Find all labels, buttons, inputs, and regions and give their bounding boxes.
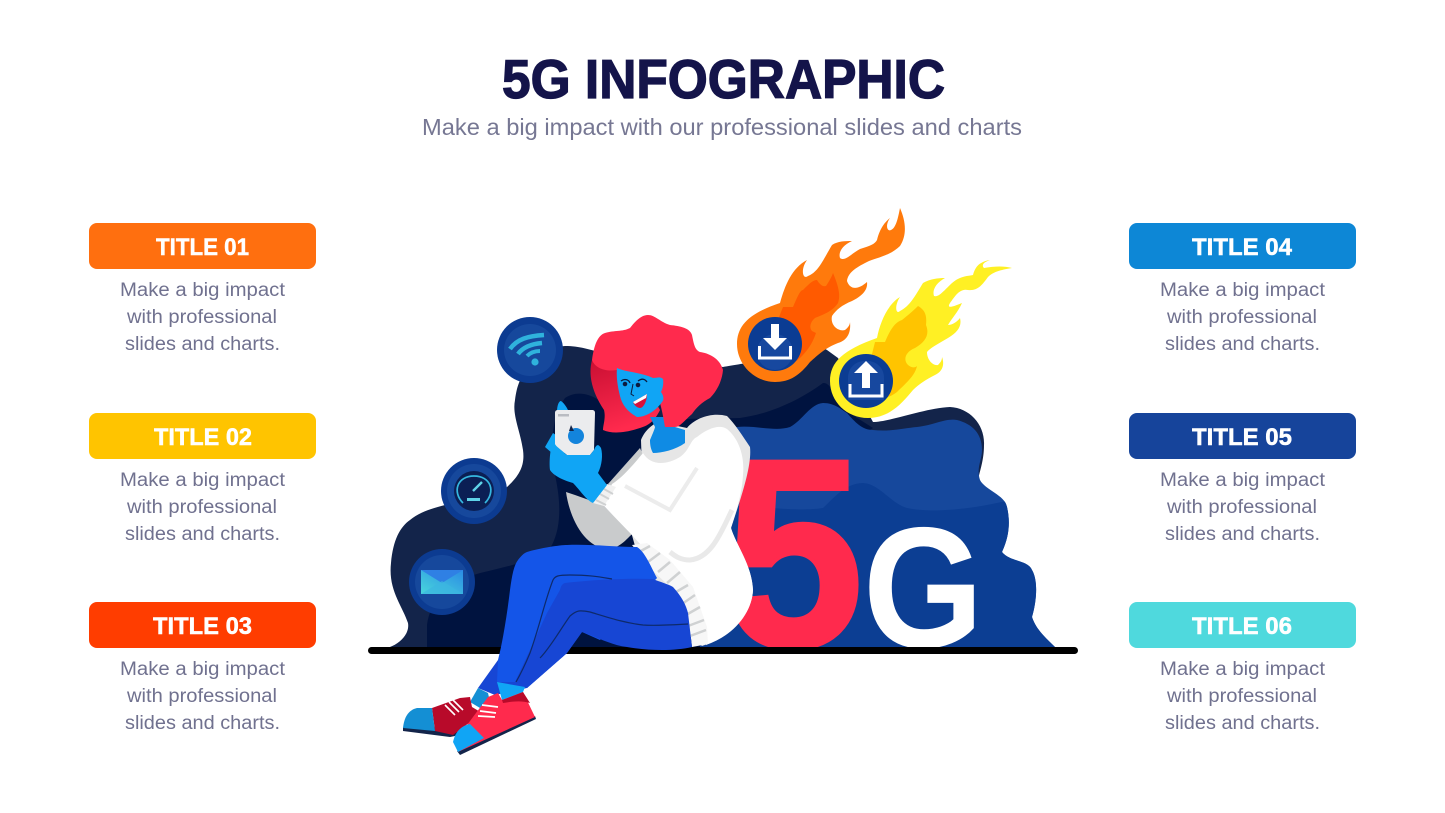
text block: title 05: with professional [1166,497,1317,518]
label bar: title 03 [89,602,316,648]
text block: title 05 [1160,470,1326,545]
icon: wifi [497,317,563,383]
panel: title 06 [1129,602,1356,734]
heading: title 04: TITLE 04 [1192,234,1293,261]
orange flame [737,208,905,382]
ribbed sweater hem [632,543,708,647]
inner flame [868,306,927,398]
sweater fold lower [670,510,732,560]
phone [555,410,595,455]
neck [650,417,685,453]
text block: title 04: slides and charts. [1165,334,1320,355]
text block: title 02: slides and charts. [125,524,280,545]
blue blob lower shade [700,483,1055,647]
trouser seam lower [540,611,688,658]
person [403,315,753,755]
darker background shadow [427,383,873,648]
icon: mail [409,549,475,615]
icon: speedometer [441,458,507,524]
front sock [497,682,525,700]
sweater fold [625,468,697,510]
sweater shell [625,415,753,646]
title: 5G INFOGRAPHIC [502,48,945,110]
text block: title 01: Make a big impact [120,280,286,301]
text block: title 01 [120,280,286,355]
text block: title 01: slides and charts. [125,334,280,355]
ball highlight [757,334,793,370]
heading: title 03: TITLE 03 [153,613,252,640]
text block: title 06 [1160,659,1326,734]
far leg shade [515,579,692,688]
back sock [470,688,490,708]
ball [748,317,802,371]
text block: title 01: with professional [126,307,277,328]
text block: title 04 [1160,280,1326,355]
eyes and nose [621,379,647,396]
fireball: download [737,208,905,382]
text block: title 02 [120,470,286,545]
text block: title 05: slides and charts. [1165,524,1320,545]
label bar: title 01 [89,223,316,269]
ribbed cuff [593,484,616,506]
gray sleeve [566,448,643,549]
big letter G: G [863,491,983,684]
text block: title 04: Make a big impact [1160,280,1326,301]
panel: title 02 [89,413,316,545]
text block: title 04: with professional [1166,307,1317,328]
inner flame [770,273,839,364]
icon: upload tray [850,384,882,396]
heading: title 01: TITLE 01 [156,234,249,261]
text block: title 03: with professional [126,686,277,707]
heading: title 06: TITLE 06 [1192,613,1292,640]
front hair [592,315,723,427]
label bar: title 02 [89,413,316,459]
icon: download arrow [763,324,787,350]
blue background blob [700,403,1055,647]
icon: upload arrow [854,361,878,388]
subtitle: Make a big impact with our professional slides and charts [422,114,1022,140]
text block: title 06: slides and charts. [1165,713,1320,734]
back leg lower [478,620,567,695]
label bar: title 04 [1129,223,1356,269]
mouth [633,394,647,408]
heading: title 05: TITLE 05 [1192,424,1292,451]
label bar: title 05 [1129,413,1356,459]
text block: title 03: Make a big impact [120,659,286,680]
panel: title 05 [1129,413,1356,545]
white sweater body [603,427,753,645]
text block: title 05: Make a big impact [1160,470,1326,491]
text block: title 03: slides and charts. [125,713,280,734]
fireball: upload [830,260,1012,418]
back fingers and thumb [545,401,570,460]
near leg [497,545,657,688]
back shoe [403,697,482,737]
icon: download tray [760,346,790,358]
panel: title 03 [89,602,316,734]
big number 5: 5 [725,404,864,703]
text block: title 06: with professional [1166,686,1317,707]
trouser seam upper [516,575,612,682]
face [617,368,663,417]
dark background blob [387,346,984,648]
front shoe [453,692,536,755]
panel: title 01 [89,223,316,355]
ball highlight [848,361,884,400]
text block: title 06: Make a big impact [1160,659,1326,680]
yellow flame [830,260,1012,418]
heading: title 02: TITLE 02 [154,424,252,451]
label bar: title 06 [1129,602,1356,648]
panel: title 04 [1129,223,1356,355]
ball [839,354,893,408]
text block: title 03 [120,659,286,734]
ground line [368,647,1078,654]
text block: title 02: Make a big impact [120,470,286,491]
back hair [590,360,660,432]
central illustration [368,208,1078,755]
text block: title 02: with professional [126,497,277,518]
hand [550,437,607,503]
